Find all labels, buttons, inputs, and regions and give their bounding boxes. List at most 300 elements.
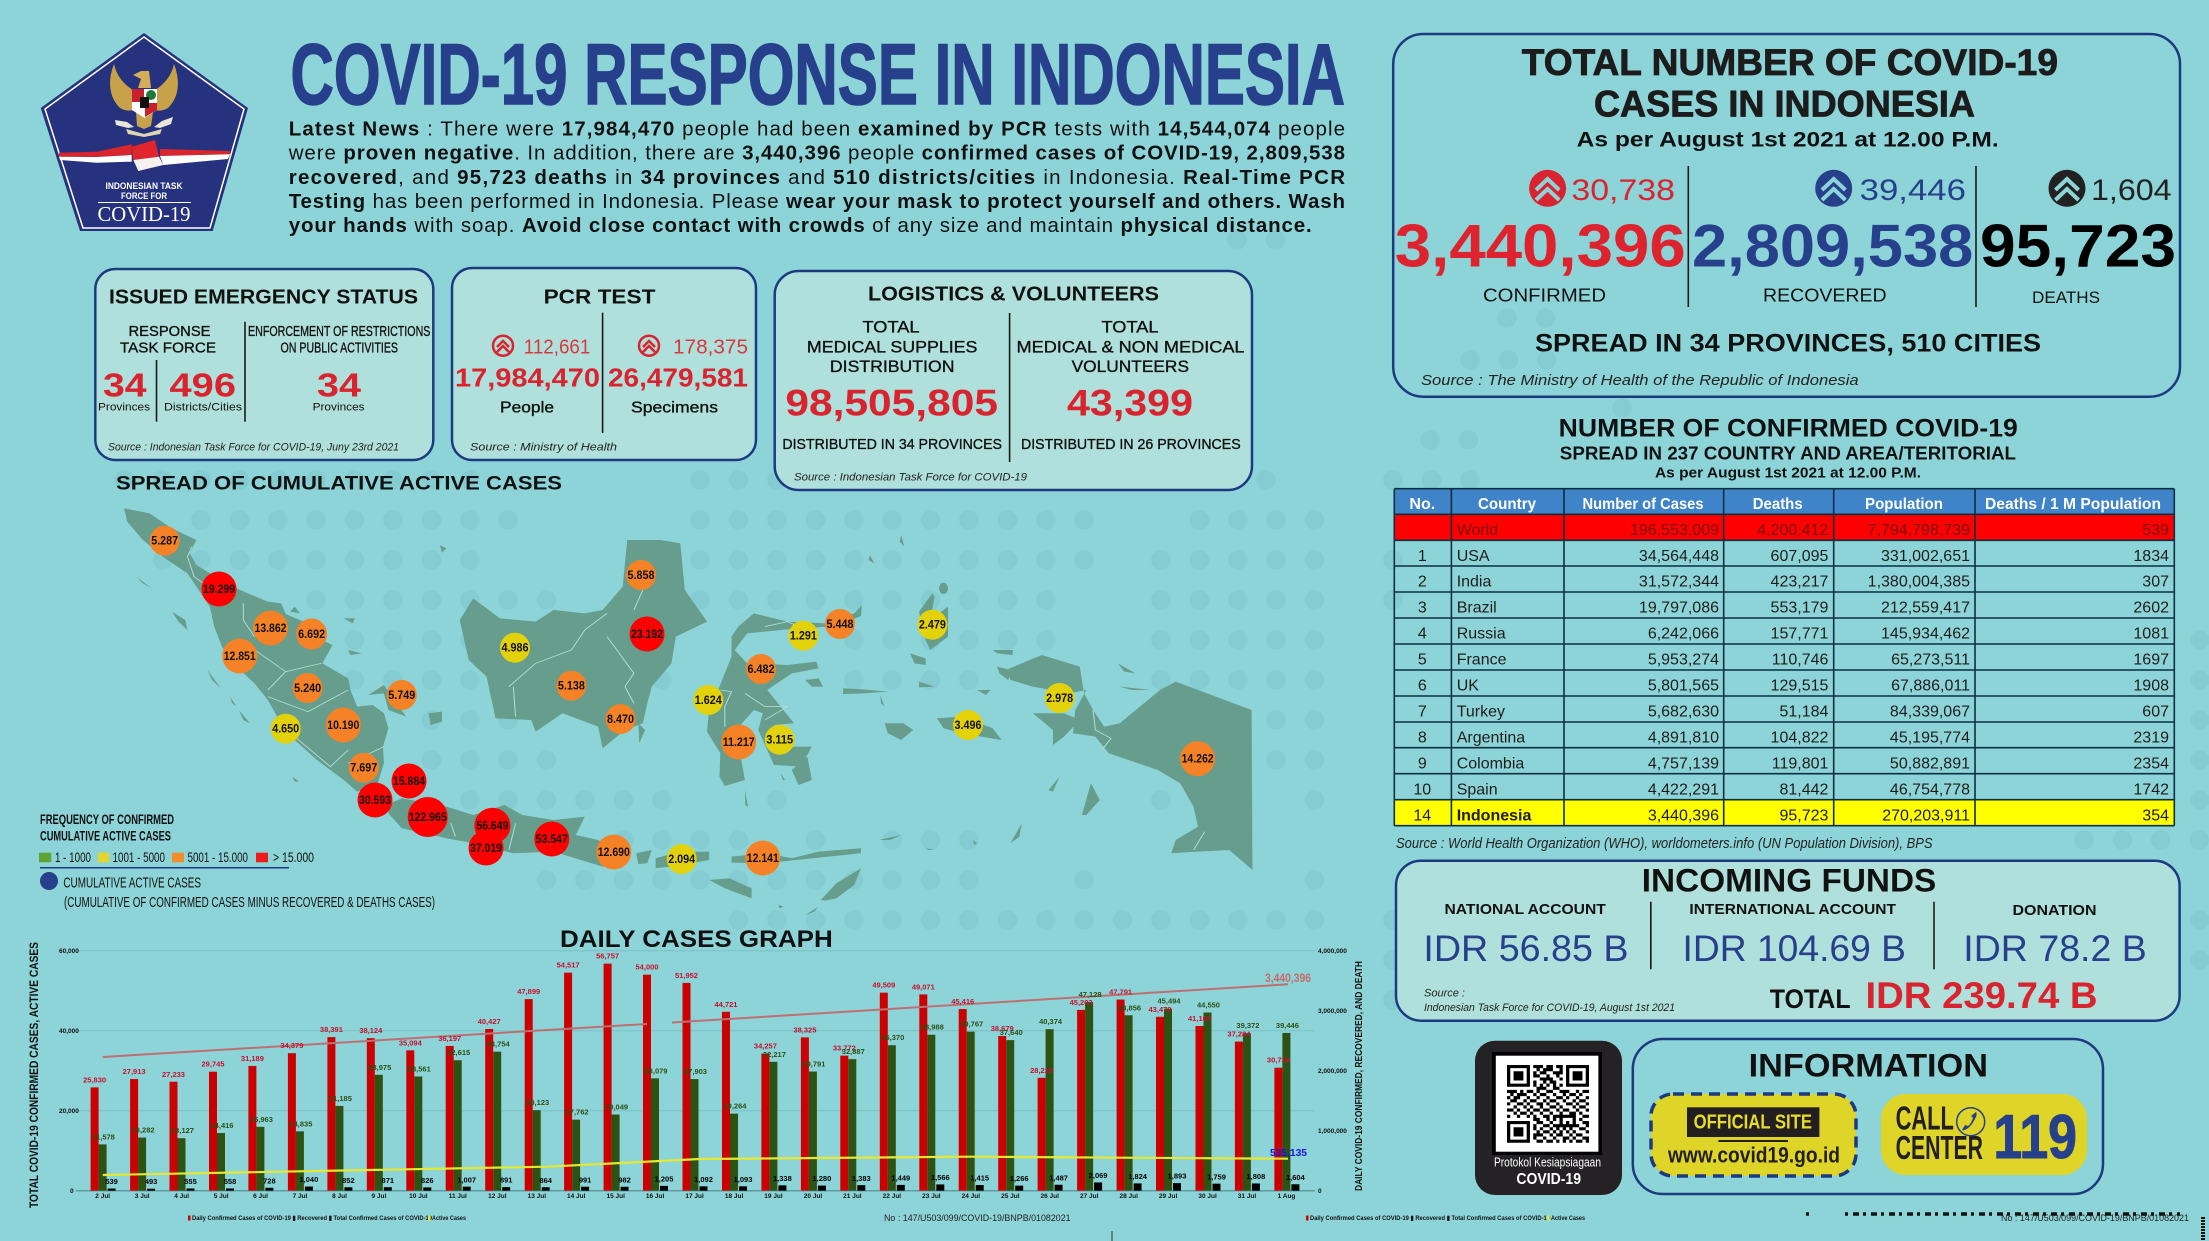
data labels: daily confirmed: 33,772 — [833, 1044, 856, 1053]
table row: Turkey: 51,184 — [1779, 704, 1829, 721]
badge: call center: CALL — [1896, 1099, 1954, 1136]
date labels: 18 Jul — [725, 1193, 744, 1200]
map: bubbles: 12.690 — [598, 847, 630, 859]
table row: Brazil: 553,179 — [1771, 600, 1828, 617]
table header: Deaths / 1 M Population — [1985, 496, 2161, 513]
table row: Turkey — [1418, 704, 2169, 721]
table row: Spain: 46,754,778 — [1890, 781, 1970, 798]
data labels: deaths: 558 — [224, 1177, 236, 1186]
date labels: 17 Jul — [685, 1193, 704, 1200]
spread line: SPREAD IN 34 PROVINCES, 510 CITIES — [1535, 330, 2041, 358]
table row: Argentina: 104,822 — [1771, 730, 1828, 747]
map: bubbles: 4.650 — [272, 724, 299, 736]
data labels: recovered: 17,762 — [566, 1108, 589, 1117]
data labels: recovered: 32,217 — [763, 1050, 786, 1059]
data labels: recovered: 14,835 — [289, 1119, 312, 1128]
data labels: daily confirmed: 31,189 — [241, 1054, 264, 1063]
data labels: deaths: 871 — [382, 1176, 394, 1185]
table row: UK: 6 — [1418, 678, 1427, 695]
logo: Indonesian Task Force for COVID-19 — [41, 33, 248, 231]
table row: India: India — [1457, 574, 1491, 591]
data labels: daily confirmed: 51,952 — [675, 971, 698, 980]
table row: Russia: 1081 — [2133, 626, 2169, 643]
map: bubbles: 8.470 — [607, 714, 634, 726]
map: bubbles: 2.978 — [1046, 693, 1074, 705]
table row: Colombia: 50,882,891 — [1890, 755, 1970, 772]
panel: incoming funds: INTERNATIONAL ACCOUNT — [1689, 901, 1896, 918]
table header — [1409, 496, 2161, 513]
panel: issued emergency status — [95, 269, 433, 460]
data labels: deaths: 1,824 — [1128, 1172, 1148, 1181]
table row: USA: USA — [1457, 548, 1490, 565]
data labels: recovered: 13,282 — [132, 1126, 155, 1135]
data labels: recovered: 14,416 — [211, 1121, 233, 1130]
data labels: daily confirmed: 38,124 — [359, 1026, 383, 1035]
heading: PCR TEST — [544, 286, 655, 308]
table row: World: 196,553,009 — [1630, 522, 1719, 539]
table row: Russia: 145,934,462 — [1881, 626, 1970, 643]
table row: UK: 1908 — [2133, 678, 2169, 695]
map legend: 1001 - 5000 — [112, 850, 165, 865]
data labels: deaths: 1,040 — [300, 1175, 318, 1184]
panel: incoming funds: IDR 56.85 B — [1423, 928, 1628, 969]
date labels: 28 Jul — [1119, 1193, 1138, 1200]
map legend: 5001 - 15.000 — [188, 850, 248, 865]
table row: France: 65,273,511 — [1891, 652, 1970, 669]
stat: confirmed: 3,440,396 — [1395, 213, 1686, 280]
panel: issued emergency status: Districts/Cities — [164, 402, 243, 414]
data labels: daily confirmed: 49,071 — [912, 982, 935, 991]
map: bubbles: 6.692 — [298, 629, 325, 641]
data labels: daily confirmed: 37,284 — [1227, 1030, 1251, 1039]
data labels: recovered — [92, 990, 1299, 1141]
map: western islands — [124, 508, 707, 867]
map: bubbles: 122.965 — [409, 812, 447, 824]
data labels: daily confirmed: 36,197 — [438, 1034, 461, 1043]
table row: Russia — [1418, 626, 2169, 643]
date labels: 25 Jul — [1001, 1193, 1020, 1200]
panel: incoming funds — [1396, 861, 2180, 1021]
panel: issued emergency status: RESPONSE — [128, 323, 210, 340]
panel: PCR test: 178,375 — [673, 336, 748, 358]
table row: Brazil: 2602 — [2133, 600, 2169, 617]
badge: call center — [1881, 1094, 2087, 1175]
map: bubbles: 5.749 — [388, 690, 415, 702]
panel: logistics and volunteers: VOLUNTEERS — [1072, 357, 1189, 376]
table row: Brazil: 19,797,086 — [1639, 600, 1719, 617]
date labels: 14 Jul — [567, 1193, 586, 1200]
table row: India: 1,380,004,385 — [1868, 574, 1970, 591]
axis labels: 60,000 — [59, 948, 79, 955]
icon: QR code — [1507, 1065, 1589, 1143]
data labels: daily confirmed: 45,416 — [951, 997, 974, 1006]
QR card: COVID-19 — [1516, 1171, 1581, 1188]
table row: France — [1418, 652, 2169, 669]
table row: Brazil — [1418, 600, 2169, 617]
data labels: deaths: 1,383 — [852, 1174, 871, 1183]
data labels: deaths: 1,007 — [457, 1175, 476, 1184]
table row: India — [1418, 574, 2169, 591]
panel: issued emergency status: ON PUBLIC ACTIVITIES — [280, 340, 398, 357]
map: bubbles: 56.649 — [476, 821, 508, 833]
panel: issued emergency status: TASK FORCE — [120, 340, 216, 357]
table: confirmed cases by country — [1394, 489, 2174, 826]
label: total confirmed: 3,440,396 — [1265, 973, 1311, 985]
table row: Colombia: Colombia — [1457, 755, 1524, 772]
data labels: deaths: 1,604 — [1286, 1173, 1306, 1182]
table row: USA: 1 — [1418, 548, 1427, 565]
stat: confirmed: 30,738 — [1571, 174, 1675, 207]
chart legend: Daily Confirmed Cases of COVID-19 ▮ Recovered ▮ Total Confirmed Cases of COVID-19 — [192, 1215, 432, 1222]
table row: Spain: Spain — [1457, 781, 1498, 798]
date labels — [95, 1193, 1295, 1200]
map: bubbles: 7.697 — [350, 763, 377, 775]
data labels: deaths — [105, 1171, 1306, 1186]
table row: UK: 67,886,011 — [1891, 678, 1970, 695]
table row: Indonesia — [1413, 807, 2169, 824]
panel: incoming funds: IDR 78.2 B — [1963, 928, 2147, 969]
ghost legend: Active Cases — [1551, 1215, 1585, 1222]
date labels: 1 Aug — [1278, 1193, 1295, 1200]
data labels: daily confirmed: 43,479 — [1149, 1005, 1171, 1014]
table row: Spain: 81,442 — [1779, 781, 1829, 798]
badge: official site: OFFICIAL SITE — [1694, 1111, 1812, 1133]
map legend: 1 - 1000 — [55, 850, 91, 865]
data labels: deaths: 493 — [145, 1177, 157, 1186]
data labels: recovered: 47,128 — [1079, 990, 1102, 999]
panel: PCR test: Source : Ministry of Health — [470, 442, 617, 454]
data labels: recovered: 15,963 — [250, 1115, 273, 1124]
logo text: INDONESIAN TASK — [106, 181, 183, 192]
data labels: recovered: 44,550 — [1197, 1000, 1220, 1010]
map: bubbles: 4.986 — [502, 643, 528, 655]
date labels: 11 Jul — [449, 1193, 467, 1200]
text block: latest news: your hands with soap. Avoid close contact with crowds of any size and maintain physical distance. — [289, 214, 1312, 237]
data labels: deaths: 864 — [539, 1176, 553, 1185]
table row: World — [1457, 522, 2169, 539]
data labels: deaths: 826 — [421, 1176, 434, 1185]
source: Source : The Ministry of Health of the Republic of Indonesia — [1421, 372, 1859, 389]
map: bubbles — [150, 526, 1215, 876]
table row: UK — [1418, 678, 2169, 695]
text block: latest news: Testing has been performed in Indonesia. Please wear your mask to protect yourself and others. Wash — [289, 190, 1345, 213]
stat: recovered: 2,809,538 — [1692, 213, 1973, 280]
date labels: 15 Jul — [606, 1193, 625, 1200]
table row: Colombia: 2354 — [2133, 755, 2169, 772]
table row: World: 4,200,412 — [1757, 522, 1828, 539]
data labels: daily confirmed: 47,791 — [1109, 988, 1132, 996]
table row: USA: 1834 — [2133, 548, 2169, 565]
map: bubbles: 5.240 — [294, 683, 321, 695]
data labels: recovered: 28,079 — [645, 1066, 667, 1075]
date labels: 19 Jul — [764, 1193, 783, 1200]
heading: TOTAL NUMBER OF COVID-19 — [1522, 42, 2058, 83]
badge: call center: CENTER — [1896, 1129, 1983, 1166]
map: eastern islands — [656, 535, 1252, 915]
axis labels — [59, 948, 1347, 1195]
data labels: recovered: 36,370 — [881, 1033, 904, 1042]
data labels: deaths: 1,338 — [773, 1174, 792, 1183]
table row: UK: 5,801,565 — [1648, 678, 1719, 695]
date labels: 21 Jul — [843, 1193, 862, 1200]
table header: No. — [1409, 496, 1435, 513]
table row: Indonesia: Indonesia — [1457, 807, 1531, 824]
left axis title: TOTAL COVID-19 CONFIRMED CASES, ACTIVE CASES — [27, 942, 41, 1208]
panel: logistics and volunteers: DISTRIBUTED IN 34 PROVINCES — [782, 436, 1002, 453]
data labels: deaths: 539 — [105, 1177, 118, 1186]
heading: number of confirmed COVID-19: SPREAD IN 237 COUNTRY AND AREA/TERITORIAL — [1560, 443, 2016, 463]
panel: issued emergency status: 34 — [317, 367, 362, 404]
data labels: daily confirmed: 45,203 — [1070, 998, 1093, 1007]
data labels: deaths: 982 — [618, 1175, 631, 1184]
panel: issued emergency status: Provinces — [98, 402, 151, 414]
date labels: 26 Jul — [1040, 1193, 1059, 1200]
text block: latest news: Latest News : There were 17,984,470 people had been examined by PCR tests with 14,544,074 people — [289, 118, 1345, 141]
table row: Indonesia: 270,203,911 — [1882, 807, 1970, 824]
map: bubbles: 37.019 — [470, 843, 502, 855]
QR card — [1475, 1041, 1622, 1195]
panel: PCR test: 17,984,470 — [455, 363, 600, 393]
axis labels: 0 — [1318, 1188, 1322, 1195]
data labels: recovered: 43,856 — [1118, 1003, 1141, 1012]
table row: World: 539 — [2142, 522, 2169, 539]
date line: As per August 1st 2021 at 12.00 P.M. — [1577, 129, 1999, 152]
panel: PCR test: Specimens — [631, 400, 718, 417]
heading: number of confirmed COVID-19: NUMBER OF CONFIRMED COVID-19 — [1559, 415, 2018, 443]
date labels: 2 Jul — [95, 1193, 110, 1200]
badge: official site: www.covid19.go.id — [1667, 1142, 1840, 1167]
panel: logistics and volunteers: MEDICAL SUPPLIES — [807, 337, 977, 356]
data labels: daily confirmed: 38,391 — [320, 1025, 343, 1034]
chart legend: Active Cases — [432, 1215, 466, 1222]
table row: India: 307 — [2142, 574, 2169, 591]
map: bubbles: 3.115 — [766, 735, 794, 747]
table row: France: 1697 — [2133, 652, 2169, 669]
data labels: daily confirmed: 56,757 — [596, 952, 619, 961]
QR card: Protokol Kesiapsiagaan — [1494, 1155, 1601, 1170]
axis labels: 40,000 — [59, 1028, 79, 1035]
table row: Argentina: 2319 — [2133, 730, 2169, 747]
data labels: deaths: 1,205 — [655, 1174, 673, 1184]
data labels: daily confirmed: 34,257 — [754, 1042, 777, 1051]
data labels: daily confirmed: 54,000 — [636, 963, 658, 972]
axis labels: 1,000,000 — [1318, 1128, 1347, 1135]
panel: issued emergency status: Provinces — [313, 402, 365, 414]
document number: No : 147/U503/099/COVID-19/BNPB/01082021 — [884, 1213, 1071, 1224]
table row: Russia: 4 — [1418, 626, 1427, 643]
data labels: recovered: 27,903 — [684, 1067, 707, 1076]
table row: Spain: 10 — [1413, 781, 1431, 798]
map: bubbles: 3.496 — [954, 720, 982, 732]
data labels: deaths: 1,487 — [1049, 1173, 1068, 1182]
map: bubbles: 2.479 — [919, 620, 946, 632]
data labels: recovered: 40,374 — [1039, 1017, 1063, 1026]
heading: daily cases graph: DAILY CASES GRAPH — [560, 926, 833, 953]
heading: INFORMATION — [1749, 1048, 1988, 1084]
panel: logistics and volunteers: 43,399 — [1067, 382, 1193, 423]
table row: USA: 34,564,448 — [1639, 548, 1719, 565]
table row: Argentina: Argentina — [1457, 730, 1525, 747]
axis labels: 0 — [70, 1188, 74, 1195]
logo: Indonesian Task Force for COVID-19: COVID-19 — [98, 202, 190, 226]
data labels: daily confirmed: 41,168 — [1188, 1014, 1211, 1023]
map: bubbles: 12.141 — [747, 853, 779, 865]
data labels: deaths: 1,266 — [1010, 1174, 1029, 1183]
data labels: daily confirmed: 38,679 — [991, 1024, 1014, 1033]
map: bubbles: 5.448 — [826, 619, 854, 631]
table header: Population — [1865, 496, 1943, 513]
map: bubbles: 1.624 — [695, 695, 722, 707]
table row: UK: UK — [1457, 678, 1479, 695]
icon: Garuda emblem — [110, 64, 178, 137]
map legend — [39, 811, 435, 911]
text block: latest news — [288, 118, 1345, 237]
stat: deaths: DEATHS — [2032, 288, 2100, 307]
data labels: deaths: 1,280 — [813, 1174, 831, 1183]
panel: issued emergency status: 34 — [103, 367, 147, 404]
date labels: 27 Jul — [1080, 1193, 1099, 1200]
map: bubbles: 5.138 — [558, 681, 585, 693]
table header: Country — [1478, 496, 1536, 513]
table row: Spain: 1742 — [2133, 781, 2169, 798]
map: bubbles: 53.547 — [536, 834, 568, 846]
table row: World: World — [1457, 522, 1498, 539]
panel: PCR test — [452, 268, 756, 460]
panel: logistics and volunteers: TOTAL — [1102, 317, 1158, 336]
map legend: CUMULATIVE ACTIVE CASES — [63, 874, 201, 891]
map: bubbles: 23.192 — [631, 629, 663, 641]
panel: incoming funds: NATIONAL ACCOUNT — [1444, 901, 1606, 918]
map: bubbles: 30.593 — [359, 795, 391, 807]
data labels: deaths: 2,069 — [1089, 1171, 1107, 1180]
map: bubbles: 13.862 — [254, 623, 286, 635]
table row: France: France — [1457, 652, 1507, 669]
table row: Turkey: 84,339,067 — [1890, 704, 1970, 721]
table row: India: 423,217 — [1771, 574, 1828, 591]
data labels: deaths: 852 — [342, 1176, 355, 1185]
stat: deaths: 1,604 — [2091, 174, 2172, 207]
table row: Colombia: 119,801 — [1772, 755, 1828, 772]
table row: Indonesia: 3,440,396 — [1648, 807, 1719, 824]
table row: Turkey: Turkey — [1457, 704, 1505, 721]
data labels: recovered: 29,791 — [802, 1060, 825, 1068]
date labels: 24 Jul — [962, 1193, 980, 1200]
table row: Brazil: Brazil — [1457, 600, 1497, 617]
map legend: (CUMULATIVE OF CONFIRMED CASES MINUS RECOVERED & DEATHS CASES) — [64, 894, 435, 911]
bars: recovered — [99, 1002, 1290, 1191]
table row: Argentina: 8 — [1418, 730, 1427, 747]
icon: increase people — [493, 336, 513, 356]
data labels: daily confirmed: 30,738 — [1267, 1056, 1290, 1065]
table source: Source : World Health Organization (WHO), worldometers.info (UN Population Division), BPS — [1396, 835, 1933, 852]
table header: Deaths — [1753, 496, 1803, 513]
badge: official site — [1651, 1094, 1856, 1176]
data labels: recovered: 28,561 — [408, 1064, 431, 1074]
data labels: recovered: 32,615 — [447, 1048, 470, 1057]
data labels: recovered: 32,887 — [842, 1047, 865, 1056]
date labels: 13 Jul — [528, 1193, 546, 1200]
table row: USA: 331,002,651 — [1881, 548, 1970, 565]
data labels: recovered: 39,446 — [1276, 1021, 1299, 1030]
table row: Argentina — [1418, 730, 2169, 747]
map legend: FREQUENCY OF CONFIRMED — [40, 811, 174, 827]
table row: Turkey: 7 — [1418, 704, 1427, 721]
panel: incoming funds: TOTAL — [1770, 984, 1851, 1014]
date labels: 9 Jul — [371, 1193, 387, 1200]
panel: logistics and volunteers: Source : Indonesian Task Force for COVID-19 — [794, 472, 1027, 484]
table row: Indonesia: 354 — [2142, 807, 2169, 824]
table row: Argentina: 4,891,810 — [1648, 730, 1719, 747]
data labels: deaths: 1,893 — [1168, 1172, 1186, 1181]
date labels: 10 Jul — [409, 1193, 428, 1200]
stat: recovered — [1692, 170, 1973, 306]
data labels: recovered: 38,988 — [921, 1023, 944, 1032]
heading: ISSUED EMERGENCY STATUS — [109, 286, 418, 308]
table row: Russia: 6,242,066 — [1648, 626, 1719, 643]
table header: Number of Cases — [1582, 496, 1704, 513]
date labels: 3 Jul — [135, 1193, 150, 1200]
data labels: deaths: 891 — [500, 1176, 512, 1185]
data labels: deaths: 1,415 — [970, 1174, 989, 1183]
right axis title: DAILY COVID-19 CONFIRMED, RECOVERED, AND DEATH — [1353, 961, 1365, 1191]
map: bubbles: 5.287 — [151, 536, 178, 548]
table row: USA — [1418, 548, 2169, 565]
map: bubbles: 14.262 — [1182, 754, 1214, 766]
panel: logistics and volunteers — [775, 271, 1252, 490]
data labels: recovered: 19,049 — [605, 1102, 628, 1112]
table row: Indonesia: 14 — [1413, 807, 1431, 824]
data labels: recovered: 13,127 — [171, 1126, 194, 1135]
stat: recovered: 39,446 — [1860, 174, 1966, 207]
table row: Colombia — [1418, 755, 2169, 772]
data labels: deaths: 555 — [184, 1177, 197, 1186]
data labels: recovered: 20,123 — [526, 1098, 549, 1107]
map: bubbles: 15.884 — [393, 776, 426, 788]
table row: Indonesia: 95,723 — [1779, 807, 1829, 824]
data labels: daily confirmed: 47,899 — [517, 987, 540, 996]
heading: number of confirmed COVID-19 — [1559, 415, 2018, 482]
map: bubbles: 11.217 — [723, 737, 755, 749]
stat: confirmed: CONFIRMED — [1483, 286, 1606, 306]
table row: Colombia: 9 — [1418, 755, 1427, 772]
panel: logistics and volunteers: DISTRIBUTED IN 26 PROVINCES — [1021, 436, 1241, 453]
data labels: daily confirmed: 28,228 — [1030, 1066, 1053, 1075]
table row: France: 5,953,274 — [1648, 652, 1719, 669]
data labels: recovered: 19,264 — [724, 1102, 747, 1111]
trend line: total confirmed — [103, 984, 1288, 1057]
date labels: 7 Jul — [293, 1193, 308, 1200]
data labels: daily confirmed: 27,913 — [123, 1067, 146, 1076]
data labels: daily confirmed: 49,509 — [872, 981, 895, 990]
data labels: deaths: 728 — [263, 1176, 276, 1185]
panel: incoming funds: Indonesian Task Force for COVID-19, August 1st 2021 — [1424, 1002, 1675, 1014]
panel: incoming funds: IDR 239.74 B — [1866, 975, 2098, 1016]
bars: daily confirmed — [91, 964, 1282, 1191]
data labels: deaths: 1,449 — [891, 1174, 910, 1182]
panel: incoming funds: IDR 104.69 B — [1682, 928, 1906, 969]
table row: Argentina: 45,195,774 — [1890, 730, 1970, 747]
data labels: daily confirmed — [83, 952, 1290, 1084]
date labels: 31 Jul — [1238, 1193, 1256, 1200]
table row: USA: 607,095 — [1771, 548, 1828, 565]
axis labels: 4,000,000 — [1318, 948, 1347, 955]
data labels: daily confirmed: 35,094 — [399, 1038, 423, 1047]
icon: red and white ribbon — [59, 140, 230, 171]
date labels: 8 Jul — [332, 1193, 347, 1200]
table row: France: 5 — [1418, 652, 1427, 669]
ghost legend: Daily Confirmed Cases of COVID-19 ▮ Recovered ▮ Total Confirmed Cases of COVID-19 — [1310, 1215, 1550, 1222]
data labels: daily confirmed: 44,721 — [715, 1000, 737, 1009]
